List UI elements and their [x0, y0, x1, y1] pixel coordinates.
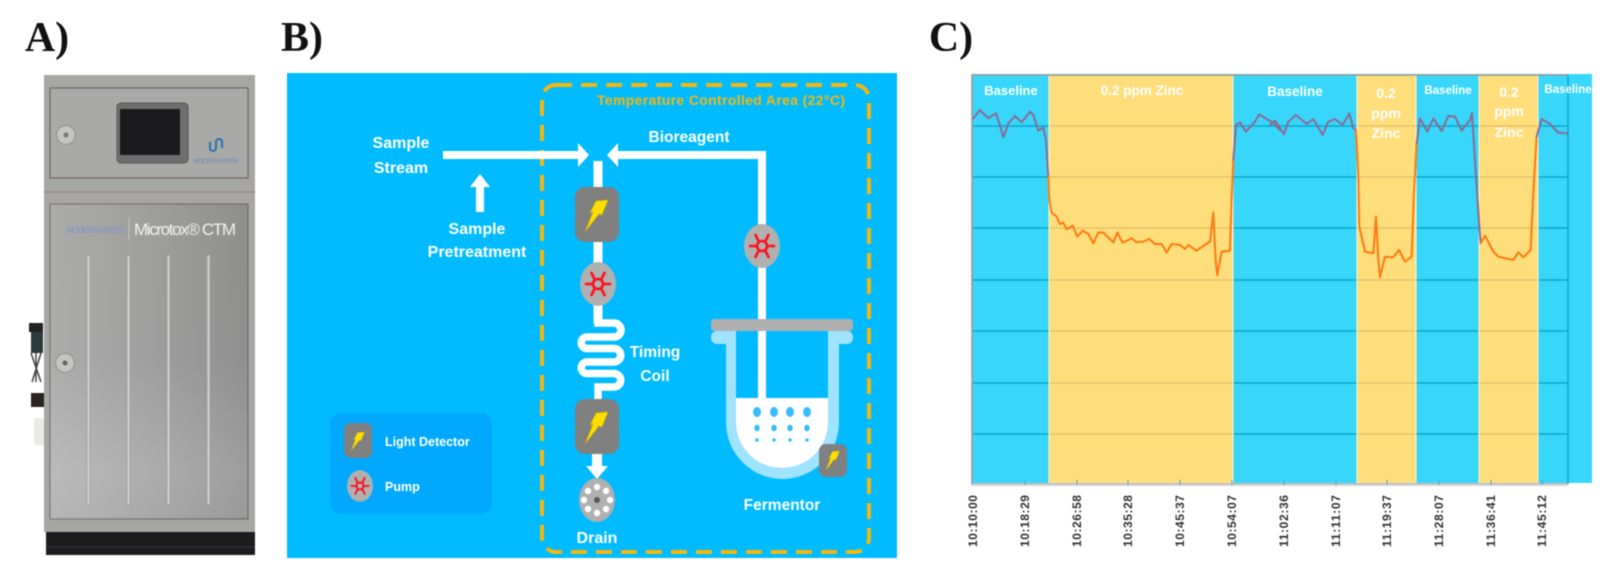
band labels: 0.2 [1499, 84, 1519, 100]
logo: MODERN WATER [194, 158, 239, 165]
pump 1 [580, 262, 616, 306]
temperature controlled area [542, 85, 869, 552]
band labels [984, 83, 1592, 141]
detector 2 [575, 399, 619, 454]
band labels: Zinc [1372, 125, 1401, 141]
time axis labels: 11:11:07 [1329, 495, 1343, 547]
time axis labels: 10:35:28 [1121, 495, 1135, 547]
temperature label: Temperature Controlled Area (22°C) [597, 92, 845, 108]
time axis labels: 10:54:07 [1225, 495, 1239, 547]
legend: Pump [385, 480, 420, 494]
pretreatment arrow [470, 174, 490, 212]
band labels: Zinc [1495, 124, 1524, 140]
time axis labels: 11:19:37 [1380, 495, 1394, 547]
detector 1 [575, 187, 619, 242]
side equipment [29, 323, 44, 445]
time axis labels: 11:45:12 [1535, 495, 1549, 547]
time axis labels: 10:26:58 [1070, 495, 1084, 547]
band labels: Baseline [1267, 84, 1323, 99]
time axis labels: 11:28:07 [1432, 495, 1446, 547]
grid lines on baseline [972, 126, 1568, 434]
main pipe [594, 161, 602, 323]
fermentor detector [819, 444, 847, 477]
brand text [66, 218, 236, 240]
sample stream label: Sample [373, 135, 430, 152]
band labels: Baseline [984, 83, 1038, 98]
logo [194, 139, 239, 165]
drain [579, 478, 615, 522]
band labels: Baseline [1424, 85, 1472, 97]
time axis labels: 10:45:37 [1173, 495, 1187, 547]
fermentor vessel [711, 319, 853, 479]
band labels: ppm [1371, 105, 1401, 121]
time axis labels: 10:18:29 [1018, 495, 1032, 547]
panel C: zinc response chart [966, 74, 1592, 547]
legend: Light Detector [385, 435, 470, 449]
lock lower [56, 354, 74, 372]
pretreatment label: Pretreatment [428, 244, 527, 261]
sample stream arrow [443, 143, 589, 167]
pump 2 [744, 224, 780, 268]
panel B: flow diagram [287, 73, 897, 558]
door grooves [87, 255, 210, 505]
label B: B) [281, 15, 323, 61]
lock upper [56, 126, 76, 144]
bioreagent label: Bioreagent [649, 129, 729, 146]
brand text: MODERN WATER [66, 226, 124, 235]
band labels: 0.2 [1376, 85, 1396, 101]
legend [330, 413, 492, 514]
band labels: ppm [1494, 103, 1524, 119]
time axis labels: 11:36:41 [1484, 495, 1498, 547]
timing coil [581, 320, 621, 402]
bioreagent arrow [607, 143, 766, 398]
label C: C) [929, 15, 973, 61]
label A: A) [25, 15, 69, 61]
base [46, 532, 255, 555]
fermentor label: Fermentor [744, 497, 820, 514]
timing coil label: Coil [640, 368, 670, 385]
display screen [117, 103, 188, 163]
pretreatment label: Sample [449, 221, 506, 238]
timing coil label: Timing [630, 344, 680, 361]
chart frame [972, 75, 1568, 484]
sample stream label: Stream [374, 160, 428, 177]
bubbles [753, 407, 811, 442]
band labels: 0.2 ppm Zinc [1101, 83, 1184, 98]
grid lines on zinc bands [1050, 126, 1537, 434]
axis ticks [1025, 480, 1542, 485]
drain label: Drain [577, 530, 617, 547]
brand text: Microtox® CTM [134, 220, 236, 239]
time axis labels: 10:10:00 [966, 495, 980, 547]
response curve [973, 110, 1568, 277]
zinc bands [1049, 75, 1538, 483]
drain arrow [586, 454, 608, 479]
panel A: Microtox CTM cabinet [29, 75, 255, 555]
band labels: Baseline [1544, 84, 1592, 96]
time axis labels: 11:02:36 [1277, 495, 1291, 547]
time axis labels [966, 495, 1549, 547]
